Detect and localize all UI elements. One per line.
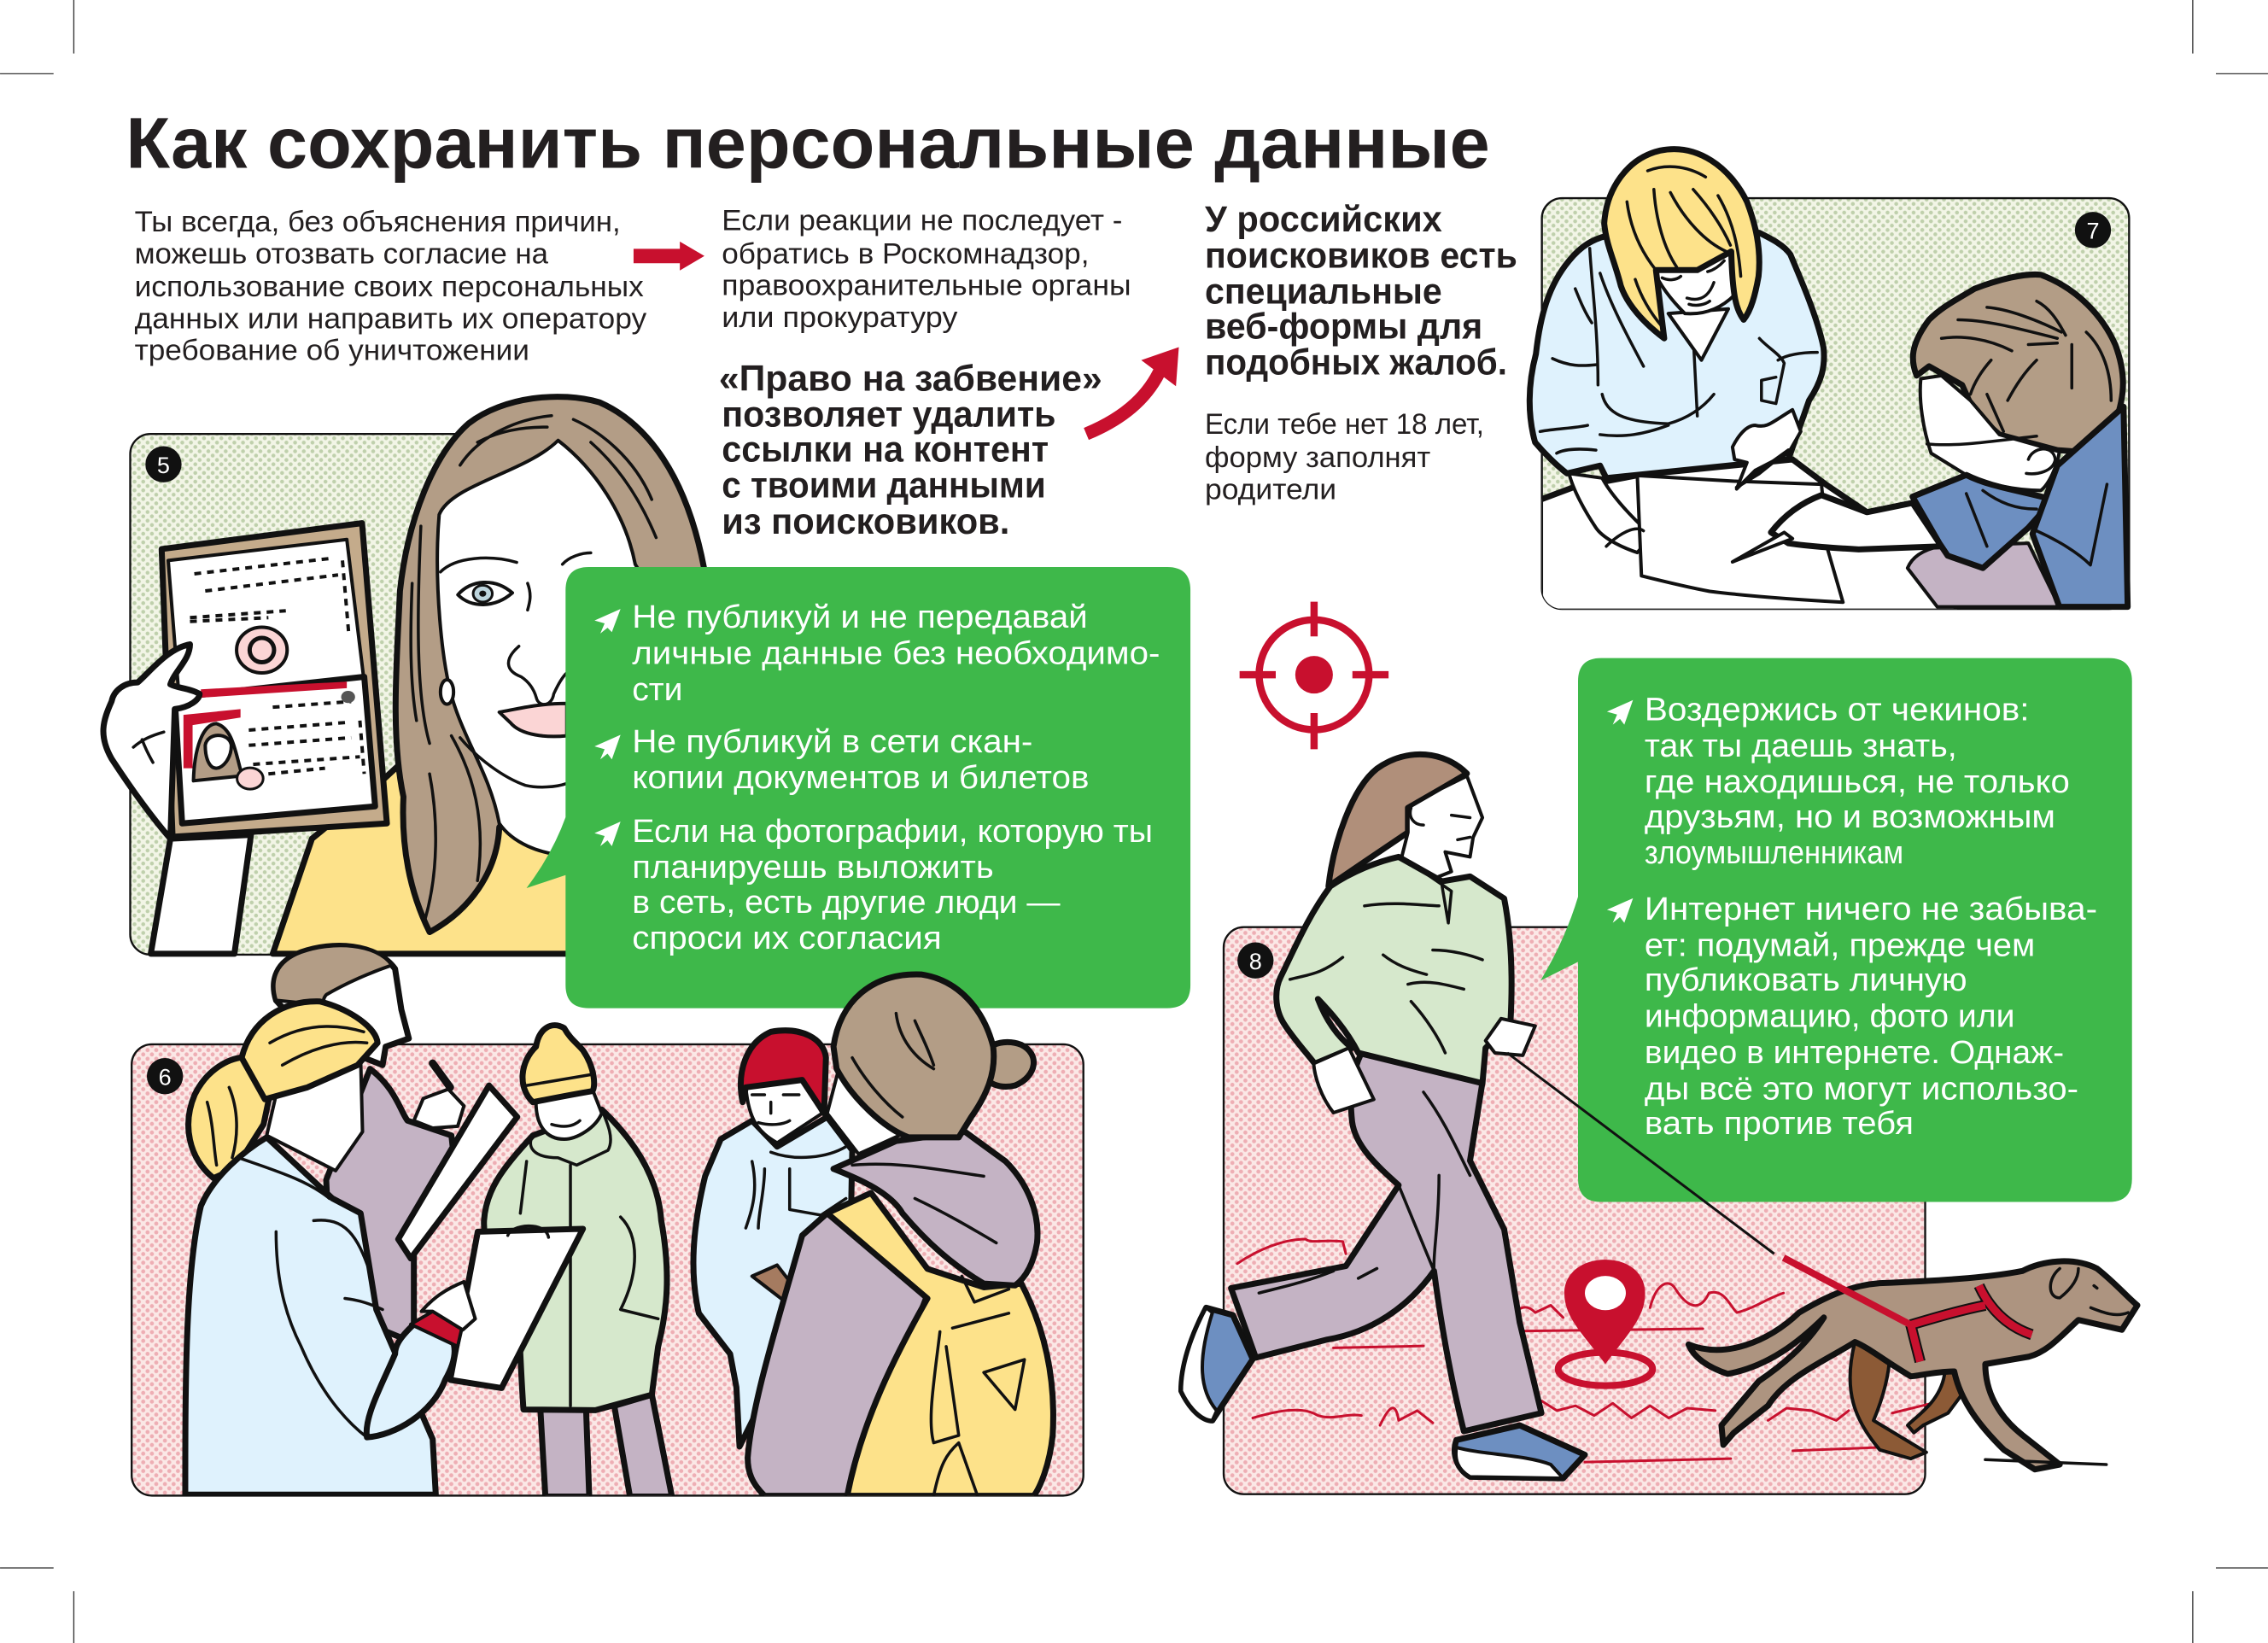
passport photo (184, 709, 263, 789)
top (1277, 857, 1511, 1084)
red cuff (411, 1312, 463, 1347)
location pin (1558, 1260, 1652, 1386)
second sheet line (1606, 529, 1644, 547)
text block: right to be forgotten: позволяет удалить (722, 395, 1056, 435)
check-in text: вать против тебя (1645, 1106, 1914, 1142)
check-in text: так ты даешь знать, (1645, 728, 1957, 764)
front woman coat (185, 1137, 435, 1494)
backpack (827, 1193, 1053, 1496)
badge 7: 7 (2086, 217, 2100, 243)
title: Как сохранить персональные данные (126, 102, 1490, 183)
text block: russian search engines: специальные (1205, 272, 1442, 312)
check-in text: злоумышленникам (1645, 835, 1903, 871)
illustration: woman with passport (103, 397, 704, 954)
hair strands (411, 416, 656, 919)
ponytail (189, 1057, 270, 1178)
arrow: red curved (1086, 348, 1179, 434)
text block: right to be forgotten: из поисковиков. (722, 501, 1009, 541)
passport cover (161, 523, 387, 837)
check-in text: Воздержись от чекинов: (1645, 693, 2029, 728)
kid coat (693, 1117, 852, 1447)
hood (833, 1131, 1038, 1285)
green person legs (541, 1395, 672, 1496)
panel 6: survey background (132, 1044, 1084, 1495)
man glasses and ear (1927, 436, 2055, 474)
man collar right (2032, 406, 2128, 607)
green person hat (523, 1026, 594, 1102)
earring (441, 680, 453, 705)
arm (151, 835, 251, 954)
woman left hand (1569, 473, 1646, 553)
rear shoe sole (1181, 1307, 1217, 1420)
rear shoe (1181, 1307, 1253, 1420)
text block: if no reaction: Если реакции не последует - (722, 204, 1122, 237)
text block: russian search engines: веб-формы для (1205, 306, 1482, 346)
tips text: спроси их согласия (632, 921, 942, 956)
text block: under 18: форму заполнят (1205, 441, 1430, 474)
check-in text: ды всё это могут использо- (1645, 1071, 2078, 1107)
bullet arrow 1 (1607, 700, 1633, 725)
man hair strands (1942, 301, 2111, 431)
bullet arrow 3 (594, 822, 621, 846)
text block: right to be forgotten: «Право на забвение» (719, 358, 1102, 398)
text block: russian search engines (1205, 199, 1517, 383)
kid smile (752, 1095, 799, 1125)
beanie knit lines (852, 1014, 933, 1117)
brows, nose and chin (441, 553, 591, 787)
green person coat (484, 1109, 667, 1410)
pants folds (1259, 1092, 1470, 1293)
check-in text: где находишься, не только (1645, 764, 2070, 800)
woman hair strands (1627, 167, 1741, 329)
illustration: jogger with dog (1181, 754, 2137, 1478)
kid face (746, 1083, 822, 1143)
pants (1231, 1053, 1541, 1431)
face features (1411, 808, 1470, 839)
passport red strip (201, 681, 347, 698)
red leash end (1784, 1258, 1911, 1324)
eye (458, 582, 512, 605)
hand holding passport (103, 645, 200, 839)
paper (1637, 476, 1843, 602)
back woman hand (414, 1089, 464, 1128)
hair (1329, 754, 1467, 886)
panel 7: background (1542, 198, 2129, 609)
text block: russian search engines: поисковиков есть (1205, 235, 1517, 275)
front woman hand (421, 1282, 476, 1330)
thin pen woman (1737, 450, 1788, 488)
badge 5: 5 (157, 452, 170, 478)
man shirt (1908, 543, 2060, 607)
icon: target crosshair (1240, 602, 1388, 749)
beanie overlapping the bubble (833, 974, 1034, 1137)
pen (433, 1063, 450, 1087)
ground shadow (1985, 1459, 2107, 1465)
dog body (1688, 1261, 2137, 1470)
passport text lines (190, 558, 365, 774)
kid coat details (745, 1147, 846, 1228)
bullet arrow 2 (1607, 898, 1633, 923)
tips text: в сеть, есть другие люди — (632, 885, 1061, 921)
woman right hand with pen (1733, 410, 1801, 489)
dog ear and eye (2050, 1268, 2128, 1314)
woman shirt folds (1540, 248, 1817, 453)
man collar left (1913, 475, 2053, 568)
bubble shape (1540, 658, 2132, 1202)
check-in text: Интернет ничего не забыва- (1645, 892, 2097, 927)
text block: right to be forgotten: с твоими данными (722, 465, 1046, 506)
text block: if no reaction: или прокуратуру (722, 301, 957, 334)
harness (1911, 1286, 2031, 1361)
arrow: red straight (634, 242, 704, 271)
bullet arrow 2 (594, 734, 621, 759)
rear hand (1313, 1048, 1374, 1113)
tablet sheet (398, 1085, 517, 1259)
back woman coat (326, 1069, 454, 1343)
kid red hat (741, 1031, 826, 1114)
check-in text: информацию, фото или (1645, 999, 2015, 1035)
collar folds (1967, 484, 2107, 565)
bubble shape (527, 567, 1190, 1009)
tips text: Если на фотографии, которую ты (632, 814, 1153, 850)
text block: right to withdraw consent: можешь отозвать согласие на (135, 237, 548, 270)
text block: under 18: родители (1205, 473, 1336, 506)
dog far legs (1850, 1340, 1979, 1459)
clipboard (450, 1229, 583, 1388)
woman hair (1605, 149, 1759, 338)
back woman hair (275, 947, 390, 1003)
tips text: Не публикуй и не передавай (632, 599, 1088, 635)
tips text: копии документов и билетов (632, 760, 1089, 796)
front shoe sole (1456, 1447, 1564, 1478)
badge 5 (145, 447, 182, 482)
panel 8: background (1224, 927, 1926, 1494)
backpack details (931, 1276, 1025, 1496)
bullet arrow 1 (594, 609, 621, 634)
check-in text: ет: подумай, прежде чем (1645, 928, 2035, 964)
red grass scribbles (1237, 1239, 1942, 1462)
passport lower page (175, 676, 375, 823)
man face (1920, 376, 2060, 490)
woman features (1662, 260, 1724, 305)
text block: under 18 (1205, 408, 1484, 506)
badge 8: 8 (1249, 948, 1262, 974)
face (437, 441, 695, 856)
panel 5: passport background (130, 434, 607, 955)
man arm (1771, 495, 1942, 549)
illustration: woman and man filling in a form (1529, 149, 2128, 611)
text block: under 18: Если тебе нет 18 лет, (1205, 408, 1484, 441)
badge 8 (1237, 943, 1273, 979)
front woman hair strands (208, 1026, 367, 1165)
leash (1507, 1053, 1774, 1254)
tips text: личные данные без необходимо- (632, 635, 1160, 671)
man pen (1733, 532, 1792, 562)
palm lines (133, 732, 164, 763)
right person neck (827, 1065, 899, 1154)
woman face (1654, 251, 1734, 313)
woman neckline (1669, 309, 1728, 360)
text block: if no reaction: обратись в Роскомнадзор, (722, 237, 1089, 270)
face and neck (1402, 776, 1482, 881)
man hair (1913, 274, 2123, 453)
top folds (1290, 857, 1482, 1053)
back woman head (274, 946, 409, 1065)
harness outline (1911, 1286, 2031, 1361)
front woman hair (242, 1002, 377, 1099)
right person jacket (748, 1213, 927, 1496)
lips (500, 704, 567, 736)
text block: right to withdraw consent: требование об уничтожении (135, 335, 529, 367)
check-in text (1645, 693, 2097, 1142)
badge 6: 6 (159, 1063, 172, 1090)
front woman collar and sleeve (238, 1158, 383, 1437)
text block: right to withdraw consent (135, 206, 646, 367)
tips text: планируешь выложить (632, 850, 994, 886)
check-in text: публиковать личную (1645, 962, 1967, 998)
clipboard clip (508, 1226, 548, 1237)
illustration: people on the street with clipboards (185, 945, 1053, 1496)
tips text (632, 599, 1160, 956)
table (1540, 459, 1958, 611)
badge 7 (2075, 212, 2111, 248)
speech bubble: publishing tips (527, 567, 1190, 1009)
glove (750, 1263, 787, 1300)
passport seal (237, 627, 287, 673)
check-in text: друзьям, но и возможным (1645, 799, 2055, 835)
text block: right to withdraw consent: использование своих персональных (135, 271, 644, 303)
green person face (536, 1089, 602, 1139)
woman shirt (1529, 233, 1824, 478)
text block: if no reaction (722, 204, 1131, 334)
speech bubble: check-ins and memory (1540, 658, 2132, 1202)
tips text: сти (632, 672, 683, 708)
text block: if no reaction: правоохранительные органы (722, 270, 1131, 302)
text block: russian search engines: У российских (1205, 199, 1442, 239)
text block: right to be forgotten (719, 358, 1102, 541)
tips text: Не публикуй в сети скан- (632, 724, 1032, 760)
text block: russian search engines: подобных жалоб. (1205, 342, 1507, 383)
green person collar and zipper (520, 1109, 658, 1406)
badge 6 (147, 1058, 183, 1094)
front hand (1486, 1019, 1535, 1055)
shirt (272, 755, 695, 954)
check-in text: видео в интернете. Однаж- (1645, 1035, 2064, 1071)
text block: right to withdraw consent: данных или направить их оператору (135, 302, 646, 335)
hood folds (852, 1164, 997, 1242)
front shoe (1455, 1425, 1585, 1478)
front woman arm (366, 1324, 454, 1437)
text block: right to be forgotten: ссылки на контент (722, 429, 1049, 469)
green person smile (527, 1074, 593, 1126)
hair (395, 397, 704, 932)
passport upper page (168, 540, 365, 698)
beanie body (833, 974, 994, 1137)
text block: right to withdraw consent: Ты всегда, без объяснения причин, (135, 206, 621, 238)
front woman head (266, 1058, 363, 1171)
beanie pom-pom (980, 1042, 1034, 1087)
